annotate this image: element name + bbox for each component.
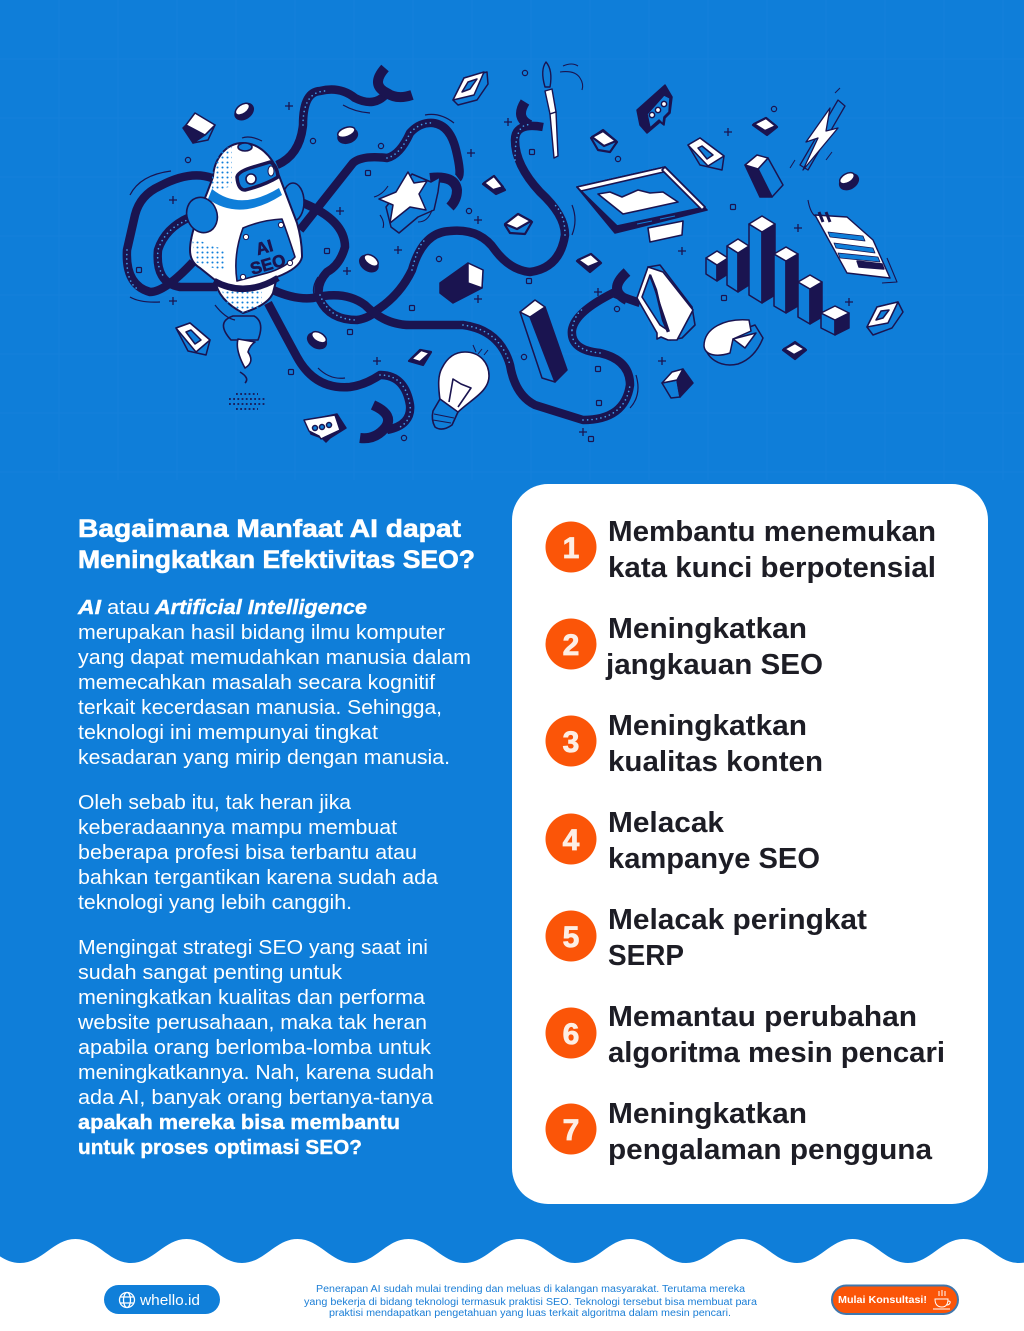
robot chest label: [248, 236, 288, 279]
footer note: yang bekerja di bidang teknologi termasuk praktisi SEO. Teknologi tersebut bisa membuat para: [304, 1297, 758, 1308]
cuboid: [745, 155, 783, 197]
call-to-action button: [832, 1286, 958, 1314]
item 3: 3: [563, 726, 579, 759]
paragraph 1: kesadaran yang mirip dengan manusia.: [78, 746, 450, 769]
tall bar: [520, 300, 567, 382]
item 4: kampanye SEO: [608, 843, 820, 875]
paragraph 1: terkait kecerdasan manusia. Sehingga,: [78, 696, 442, 719]
tube dotted highlights: [127, 91, 630, 427]
item 6: algoritma mesin pencari: [608, 1037, 945, 1069]
paragraph 2: Oleh sebab itu, tak heran jika: [78, 791, 352, 814]
item 5: [546, 904, 867, 972]
paragraph 3: Mengingat strategi SEO yang saat ini: [78, 936, 428, 959]
paragraph 3: untuk proses optimasi SEO?: [78, 1136, 362, 1159]
item 1: kata kunci berpotensial: [608, 552, 936, 584]
heading: Meningkatkan Efektivitas SEO?: [78, 546, 475, 574]
coins: [232, 100, 861, 352]
light bulb: [432, 345, 489, 429]
footer note: [304, 1284, 758, 1319]
paragraph 1: AI: [77, 596, 102, 619]
paragraph 3: website perusahaan, maka tak heran: [77, 1011, 427, 1034]
item 5: 5: [563, 921, 579, 954]
box: [440, 263, 483, 303]
item 4: Melacak: [608, 807, 725, 839]
document: [808, 200, 897, 283]
robot chest label: SEO: [248, 251, 288, 279]
paragraph 1: memecahkan masalah secara kognitif: [78, 671, 435, 694]
icon: globe: [120, 1292, 134, 1308]
footer note: Penerapan AI sudah mulai trending dan meluas di kalangan masyarakat. Terutama mereka: [316, 1284, 746, 1295]
footer note: praktisi mendapatkan pengetahuan yang luas terkait algoritma dalam mesin pencari.: [329, 1308, 731, 1319]
item 5: SERP: [608, 940, 684, 972]
heading: Bagaimana Manfaat AI dapat: [78, 515, 462, 543]
item 2: [546, 613, 823, 681]
small diamonds: [409, 118, 806, 365]
illustration: AI SEO robot with tubes and isometric objects: [127, 62, 903, 442]
item 2: jangkauan SEO: [605, 649, 823, 681]
star: [374, 172, 440, 233]
icon: coffee cup: [933, 1290, 950, 1309]
plus markers: [169, 102, 853, 436]
lightning bolt: [790, 88, 845, 170]
paragraph 3: apakah mereka bisa membantu: [78, 1111, 400, 1134]
website badge: whello.id: [139, 1292, 200, 1309]
pie chart: [704, 320, 763, 365]
item 7: 7: [563, 1114, 579, 1147]
circle and square markers: [136, 70, 777, 442]
call-to-action button: Mulai Konsultasi!: [838, 1294, 927, 1306]
paragraph 2: beberapa profesi bisa terbantu atau: [78, 841, 417, 864]
item 5: Melacak peringkat: [608, 904, 867, 936]
paragraph 3: meningkatkan kualitas dan performa: [78, 986, 426, 1009]
bar chart: [706, 216, 849, 335]
paragraph 1: [77, 596, 471, 769]
item 3: kualitas konten: [608, 746, 823, 778]
chat bubbles: [304, 85, 672, 442]
paragraph 3: sudah sangat penting untuk: [78, 961, 343, 984]
paragraph 3: meningkatkannya. Nah, karena sudah: [78, 1061, 434, 1084]
item 3: Meningkatkan: [608, 710, 807, 742]
paragraph 1: Artificial Intelligence: [154, 596, 367, 619]
paragraph 2: bahkan tergantikan karena sudah ada: [78, 866, 439, 889]
item 7: Meningkatkan: [608, 1098, 807, 1130]
paragraph 2: teknologi yang lebih canggih.: [78, 891, 352, 914]
paragraph 3: apabila orang berlomba-lomba untuk: [78, 1036, 432, 1059]
paragraph 1: merupakan hasil bidang ilmu komputer: [78, 621, 445, 644]
monitor with chart: [577, 167, 707, 242]
paragraph 3: [77, 936, 434, 1159]
item 3: [546, 710, 823, 778]
paragraph 1: yang dapat memudahkan manusia dalam: [78, 646, 471, 669]
item 1: [546, 516, 936, 584]
item 2: 2: [563, 629, 579, 662]
speech shape: [637, 265, 695, 340]
item 4: [546, 807, 820, 875]
item 4: 4: [563, 824, 580, 857]
item 2: Meningkatkan: [608, 613, 807, 645]
panel: benefits list: [512, 484, 988, 1204]
robot chest label: AI: [254, 236, 275, 259]
paint brush: [543, 62, 583, 158]
item 6: Memantau perubahan: [608, 1001, 917, 1033]
item 1: 1: [563, 532, 579, 565]
item 6: 6: [563, 1018, 579, 1051]
paragraph 2: keberadaannya mampu membuat: [78, 816, 397, 839]
text block: intro copy: [77, 515, 475, 1159]
paragraph 1: teknologi ini mempunyai tingkat: [78, 721, 378, 744]
robot: [182, 143, 304, 383]
tubes connecting objects: [127, 68, 640, 438]
motion lines: [130, 105, 638, 408]
item 6: [546, 1001, 945, 1069]
paragraph 1: atau: [107, 596, 150, 619]
cubes: [183, 113, 693, 398]
item 1: Membantu menemukan: [608, 516, 936, 548]
dot cluster under robot: [229, 394, 265, 409]
item 7: [546, 1098, 933, 1166]
paragraph 2: [78, 791, 439, 914]
heading: [78, 515, 475, 574]
paragraph 3: ada AI, banyak orang bertanya-tanya: [78, 1086, 434, 1109]
item 7: pengalaman pengguna: [608, 1134, 933, 1166]
footer band with wave edge: [0, 1239, 1024, 1331]
website badge: [104, 1285, 220, 1314]
ring diamonds: [176, 72, 903, 355]
